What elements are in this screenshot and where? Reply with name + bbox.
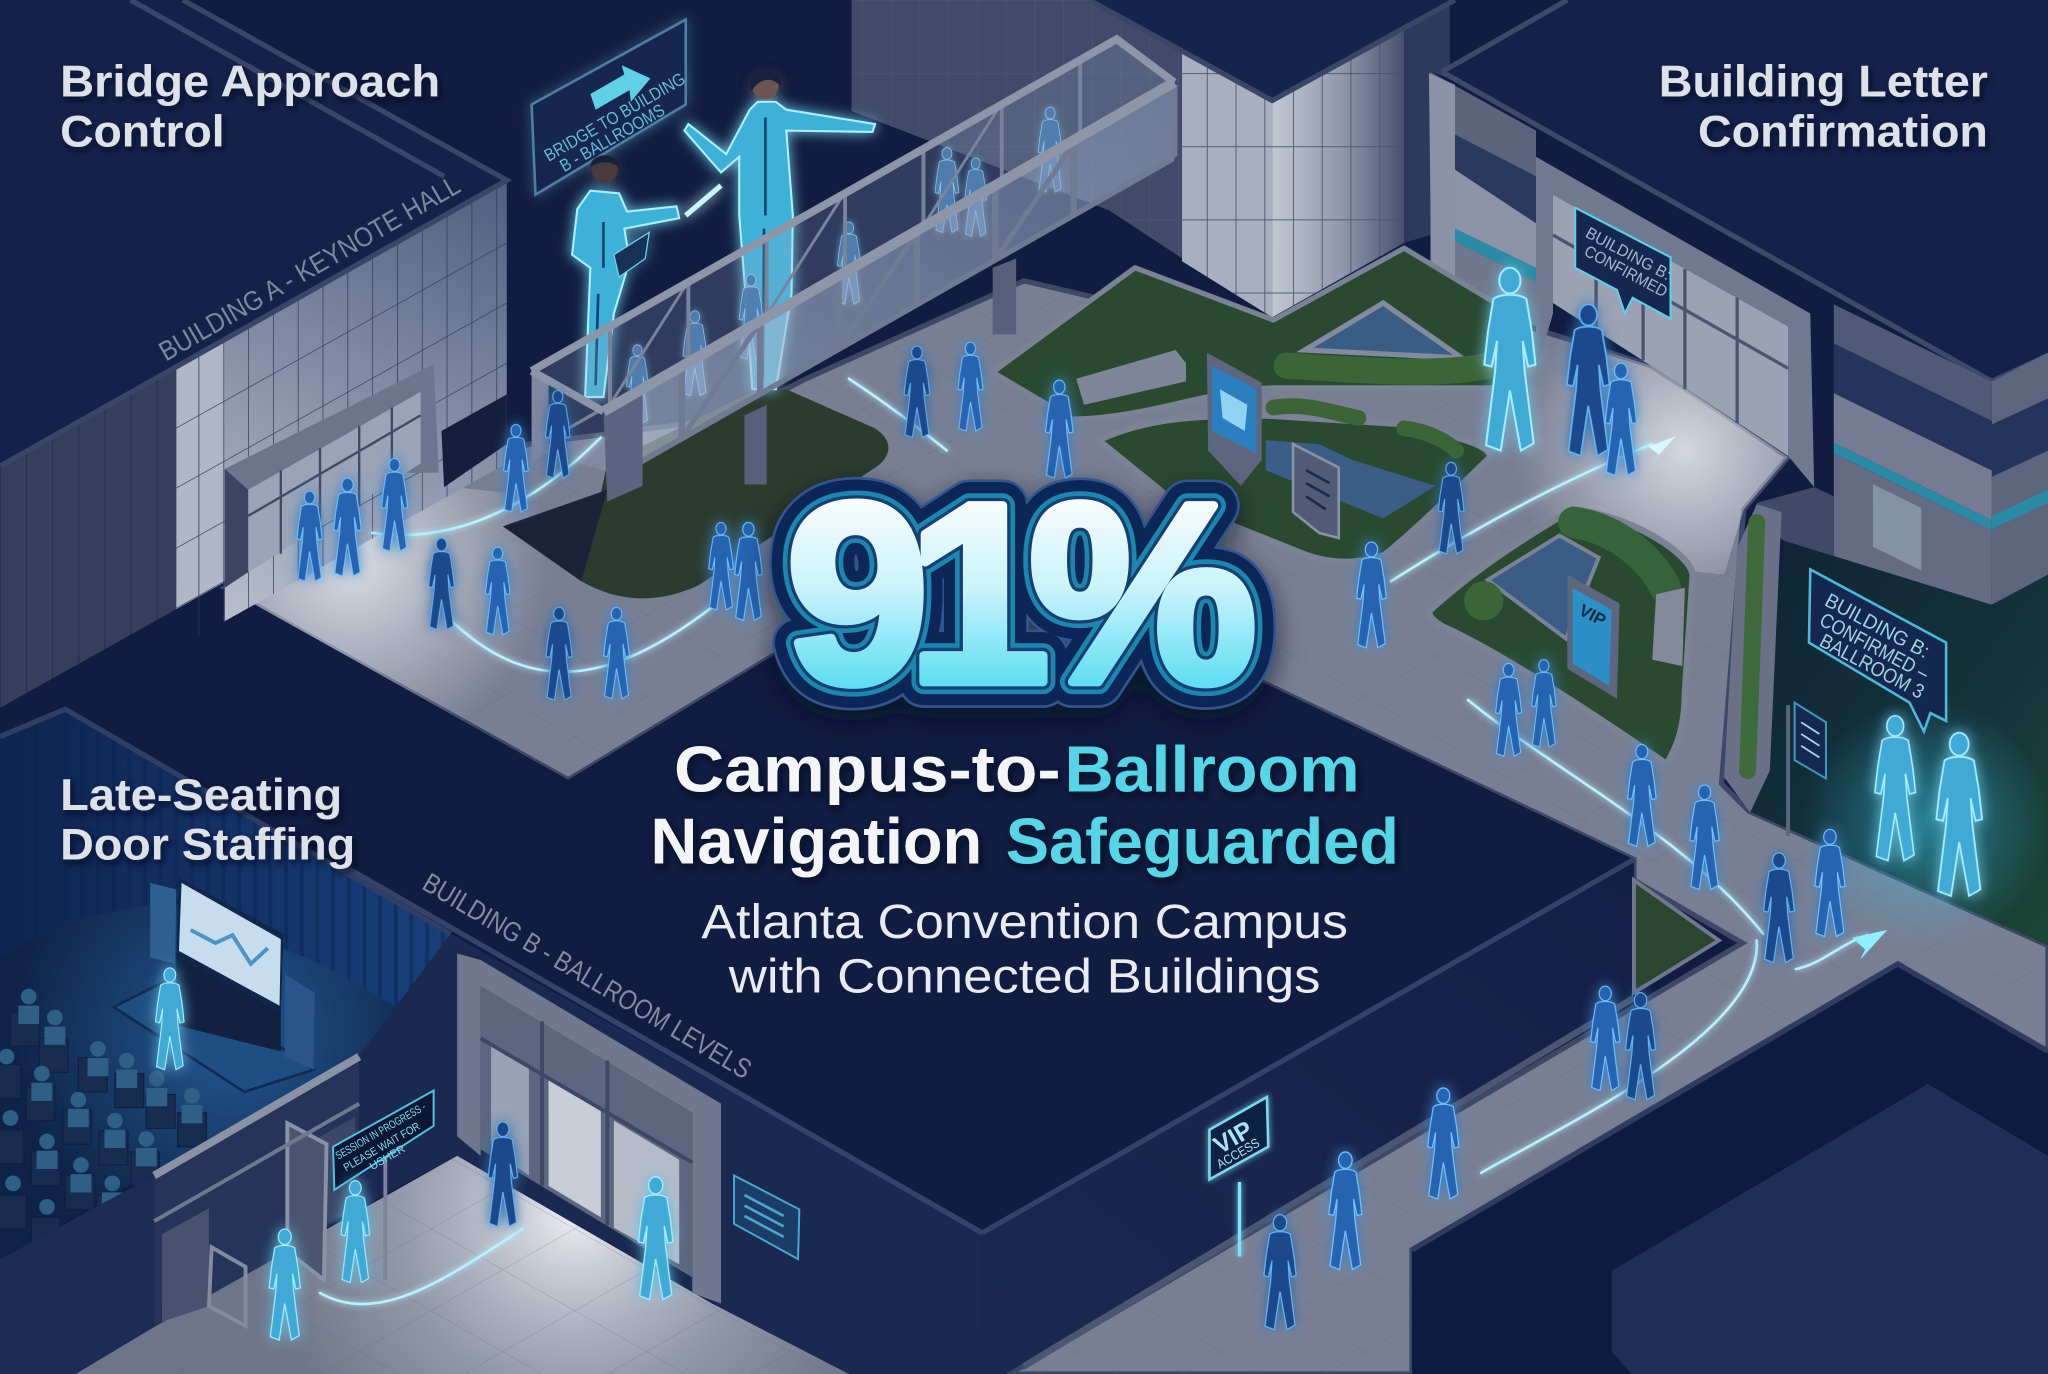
label: Building B sign: BUILDING B - BALLROOM LEVELS: [418, 867, 757, 1085]
callout: Building B confirmed: BUILDING B:: [1582, 224, 1674, 284]
label: Bridge Approach Control: Control: [60, 107, 225, 156]
callout: Building B confirmed ballroom 3: BALLROOM 3: [1816, 630, 1928, 704]
sign: wayfinding monolith: [1293, 444, 1339, 538]
callout: Building B confirmed: [1575, 208, 1674, 319]
sign: bridge direction: [532, 20, 689, 195]
callout: Building B confirmed: CONFIRMED: [1581, 242, 1670, 301]
arrow: walkway flow head: [1852, 930, 1887, 960]
label: Building Letter Confirmation: Confirmation: [1698, 107, 1988, 156]
garden: middle pond garden: [1098, 406, 1490, 562]
label: Building A sign: BUILDING A - KEYNOTE HALL: [153, 169, 465, 367]
title: Campus-to-Ballroom Navigation Safeguarded: Ballroom: [1064, 732, 1360, 805]
VIP access sign: VIP: [1209, 1116, 1258, 1160]
label: Late-Seating Door Staffing: [60, 771, 355, 869]
title: Campus-to-Ballroom Navigation Safeguarded: Safeguarded: [1006, 804, 1399, 877]
audience seated rows: [0, 1012, 206, 1243]
building: central block south wall: [982, 859, 1634, 1374]
sign: session in progress: SESSION IN PROGRESS -: [334, 1101, 428, 1162]
bridge piers: [744, 259, 1016, 485]
sign: session in progress: PLEASE WAIT FOR: [342, 1121, 422, 1174]
building: central campus tower C: [852, 0, 1455, 317]
room: Late-seating auditorium: [0, 709, 451, 1259]
skybridge connecting buildings: [532, 37, 1174, 502]
staff in glowing uniforms: [156, 268, 1982, 1340]
headline stat: 91%: 91%: [786, 451, 1250, 737]
callout: Building B confirmed ballroom 3: CONFIRMED –: [1816, 609, 1933, 685]
label: Late-Seating Door Staffing: Door Staffing: [60, 820, 355, 869]
title: Campus-to-Ballroom Navigation Safeguarded: [650, 732, 1399, 877]
kiosk: VIP access: VIP: [1576, 601, 1609, 630]
big staff: guiding usher with outstretched arm: [684, 71, 875, 389]
label: Late-Seating Door Staffing: Late-Seating: [60, 771, 342, 820]
kiosk: campus map: [1207, 353, 1262, 486]
door: Building A entrance: [225, 364, 439, 588]
partition: glass late-seating door: [154, 1057, 359, 1327]
sign: bridge direction: B - BALLROOMS: [556, 100, 668, 176]
subtitle: Atlanta Convention Campus: [701, 895, 1348, 949]
floor: Building B lobby: [76, 1156, 849, 1374]
sign: session in progress: [333, 1091, 434, 1280]
headline stat: 91%: 91%: [786, 451, 1250, 737]
VIP access sign: ACCESS: [1214, 1135, 1262, 1172]
label: Bridge Approach Control: [60, 58, 440, 156]
floor: connected plaza and walkways: [225, 281, 2048, 1374]
callout: Building B confirmed ballroom 3: BUILDING B:: [1821, 590, 1933, 663]
flow paths: wayfinding light trails: [320, 379, 1868, 1304]
headline stat: 91%: 91%: [786, 451, 1250, 737]
planter: tall hedge: [1724, 504, 1782, 812]
building A facade: [0, 182, 507, 747]
garden: upper courtyard with pond: [993, 248, 1496, 419]
VIP access sign: [1209, 1097, 1268, 1256]
building: right Building B facade: [1429, 0, 2048, 674]
big staff and bridge sign: [532, 20, 875, 397]
sign: bridge direction: BRIDGE TO BUILDING: [541, 68, 689, 165]
headline stat: 91%: 91%: [786, 451, 1250, 737]
arrow: Building B flow head: [1648, 436, 1676, 464]
subtitle: with Connected Buildings: [728, 950, 1320, 1004]
sign: lawn notice: [1788, 703, 1826, 836]
title: Campus-to-Ballroom Navigation Safeguarded: Navigation: [650, 804, 982, 877]
lower-right building: [1412, 964, 2048, 1374]
big staff: usher with wand and tablet: [572, 155, 721, 397]
audience figures: [0, 989, 202, 1215]
building: central block roof: [0, 588, 1634, 1233]
door: Building B confirmation entrance: [1536, 157, 1814, 487]
skybridge attendees inside: [626, 107, 1062, 423]
headline stat: 91%: 91%: [786, 451, 1250, 737]
subtitle: [701, 895, 1348, 1004]
garden: small corner lawn: [1634, 880, 1719, 993]
callout: Building B confirmed ballroom 3: [1809, 569, 1946, 731]
garden: right-side staff lawn: [1749, 541, 2048, 946]
label: Bridge Approach Control: Bridge Approach: [60, 58, 440, 107]
building A dark base block: [441, 394, 507, 487]
building A edges: [0, 0, 507, 466]
kiosk: VIP access: [1567, 575, 1620, 699]
ramp pit under bridge: [503, 490, 607, 581]
door: Building B ballroom entrance: [457, 953, 721, 1303]
label: Building Letter Confirmation: [1659, 58, 1988, 156]
garden: lower VIP pond garden: [1429, 509, 1693, 764]
sign: session in progress: USHER: [368, 1143, 407, 1173]
wall panel: checklist: [734, 1175, 799, 1259]
title: Campus-to-Ballroom Navigation Safeguarded: Campus-to-: [674, 732, 1061, 805]
label: Building Letter Confirmation: Building Letter: [1659, 58, 1988, 107]
attendees walking the route: [297, 304, 1845, 1330]
wall: Building B ballroom elevation: [0, 867, 982, 1374]
floor: under-bridge green patch: [581, 389, 888, 598]
